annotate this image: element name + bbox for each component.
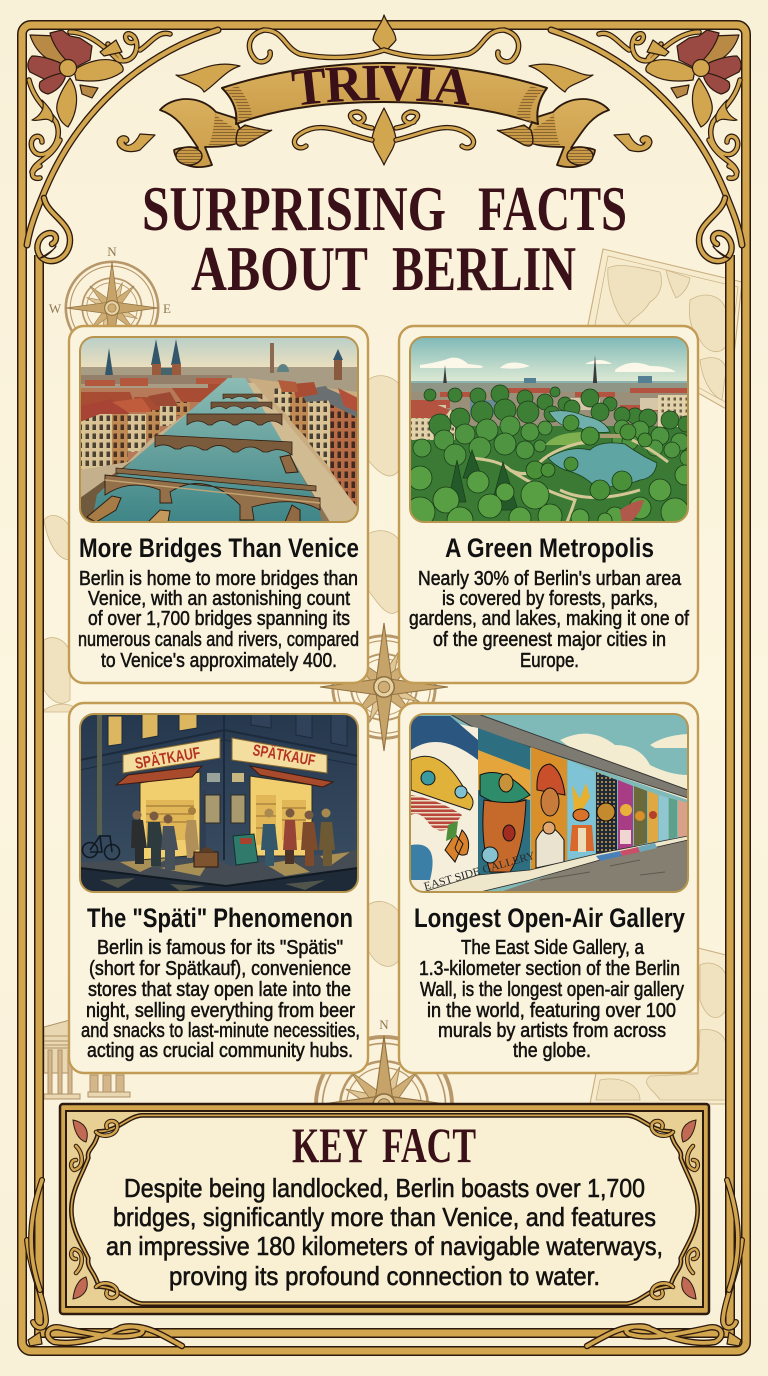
banner: lower centre ornament	[294, 108, 474, 165]
people	[131, 807, 335, 870]
meadows and paths	[545, 432, 585, 445]
banner ornament: top crest	[249, 15, 519, 62]
card: A Green Metropolis	[399, 326, 698, 683]
heading: Longest Open-Air Gallery	[414, 903, 685, 933]
boats	[87, 496, 121, 522]
background illustration: classical temple	[44, 1020, 130, 1099]
illustration: Spätkauf at night	[80, 714, 358, 892]
banner: small swirls	[117, 134, 652, 152]
card: More Bridges Than Venice	[69, 326, 368, 683]
body text: Wall, is the longest open-air gallery	[420, 979, 684, 1001]
key fact heading: KEY	[292, 1117, 368, 1173]
bicycle	[82, 836, 120, 860]
body text: 1.3-kilometer section of the Berlin	[419, 958, 680, 980]
body text: acting as crucial community hubs.	[87, 1040, 353, 1062]
illustration: Spätkauf at night: SPÄTKAUF	[134, 744, 202, 773]
body text: (short for Spätkauf), convenience	[89, 958, 351, 980]
key fact text	[106, 1173, 663, 1291]
body text: and snacks to last-minute necessities,	[81, 1020, 360, 1042]
body text: The East Side Gallery, a	[461, 937, 645, 959]
background map: top right	[587, 249, 742, 410]
middle trees	[526, 415, 652, 500]
body text: Nearly 30% of Berlin's urban area	[418, 568, 682, 590]
heading: More Bridges Than Venice	[79, 533, 359, 563]
compass rose: centre	[320, 623, 448, 751]
body text	[419, 937, 684, 1062]
card: Longest Open-Air Gallery	[399, 703, 698, 1073]
foreground trees	[411, 464, 687, 521]
key fact box	[60, 1104, 709, 1314]
body text: numerous canals and rivers, compared	[78, 629, 359, 651]
body text: to Venice's approximately 400.	[101, 650, 337, 672]
main title: ABOUT	[191, 233, 368, 304]
heading: A Green Metropolis	[445, 533, 654, 563]
sidewalk and street	[80, 850, 358, 886]
card: The "Späti" Phenomenon	[69, 703, 368, 1073]
body text: is covered by forests, parks,	[442, 588, 658, 610]
crate and vending box	[194, 852, 218, 867]
illustration: green park and lakes	[411, 338, 687, 521]
left embankment	[81, 410, 192, 497]
painted base strip	[423, 836, 688, 892]
banner title: TRIVIA	[291, 66, 470, 106]
left buildings	[81, 388, 200, 464]
body text: night, selling everything from beer	[86, 1000, 355, 1022]
compass rose: upper left	[49, 244, 171, 354]
shop signs	[123, 738, 220, 773]
right promenade	[242, 383, 358, 522]
background map: centre gap	[368, 376, 399, 966]
background map: left middle	[44, 515, 80, 712]
upper windows	[108, 714, 197, 746]
key fact text: proving its profound connection to water.	[169, 1261, 600, 1291]
illustration: East Side Gallery wall	[410, 714, 688, 893]
main title: FACTS	[478, 173, 627, 244]
awnings	[116, 766, 202, 785]
heading: The "Späti" Phenomenon	[87, 903, 353, 933]
compass rose: bottom	[315, 1017, 453, 1174]
compass rose: upper left: W	[49, 301, 62, 316]
main title	[142, 173, 627, 304]
shop windows	[140, 772, 200, 860]
banner: ribbon with tails	[159, 62, 610, 168]
illustration: Berlin canal bridges	[80, 337, 358, 522]
body text: Berlin is famous for its "Spätis"	[97, 937, 343, 959]
body text: gardens, and lakes, making it one of	[409, 608, 689, 630]
body text: of over 1,700 bridges spanning its	[88, 608, 350, 630]
body text	[409, 568, 689, 672]
body text	[78, 568, 359, 672]
illustration: Spätkauf at night: SPÄTKAUF	[251, 741, 317, 770]
key fact text: bridges, significantly more than Venice, and features	[113, 1202, 656, 1232]
main title: SURPRISING	[142, 173, 446, 244]
body text	[81, 937, 360, 1062]
background map: right of lower cards	[590, 948, 726, 1104]
body text: murals by artists from across	[438, 1020, 666, 1042]
compass rose: upper left: E	[163, 301, 171, 316]
body text: the globe.	[513, 1040, 591, 1062]
bridges	[223, 394, 262, 399]
body text: Venice, with an astonishing count	[88, 588, 350, 610]
road	[500, 838, 688, 892]
wall cap	[450, 714, 688, 798]
lakes	[549, 411, 610, 432]
body text: stores that stay open late into the	[88, 979, 351, 1001]
body text: Berlin is home to more bridges than	[79, 568, 358, 590]
body text: in the world, featuring over 100	[427, 1000, 676, 1022]
key fact text: an impressive 180 kilometers of navigable waterways,	[106, 1231, 663, 1261]
key fact heading	[292, 1117, 476, 1173]
back tree rows	[424, 385, 694, 436]
mural panels	[411, 714, 478, 892]
body text: of the greenest major cities in	[433, 629, 666, 651]
main title: BERLIN	[392, 233, 576, 304]
banner: acanthus leaves	[176, 64, 593, 92]
compass rose: bottom: N	[379, 1017, 389, 1032]
key fact heading: FACT	[382, 1117, 476, 1173]
key fact text: Despite being landlocked, Berlin boasts over 1,700	[124, 1173, 645, 1203]
body text: Europe.	[520, 650, 579, 672]
illustration: East Side Gallery wall: EAST SIDE GALLERY	[423, 850, 536, 893]
right buildings	[248, 378, 357, 497]
canal water	[92, 378, 322, 522]
compass rose: upper left: N	[107, 244, 117, 259]
